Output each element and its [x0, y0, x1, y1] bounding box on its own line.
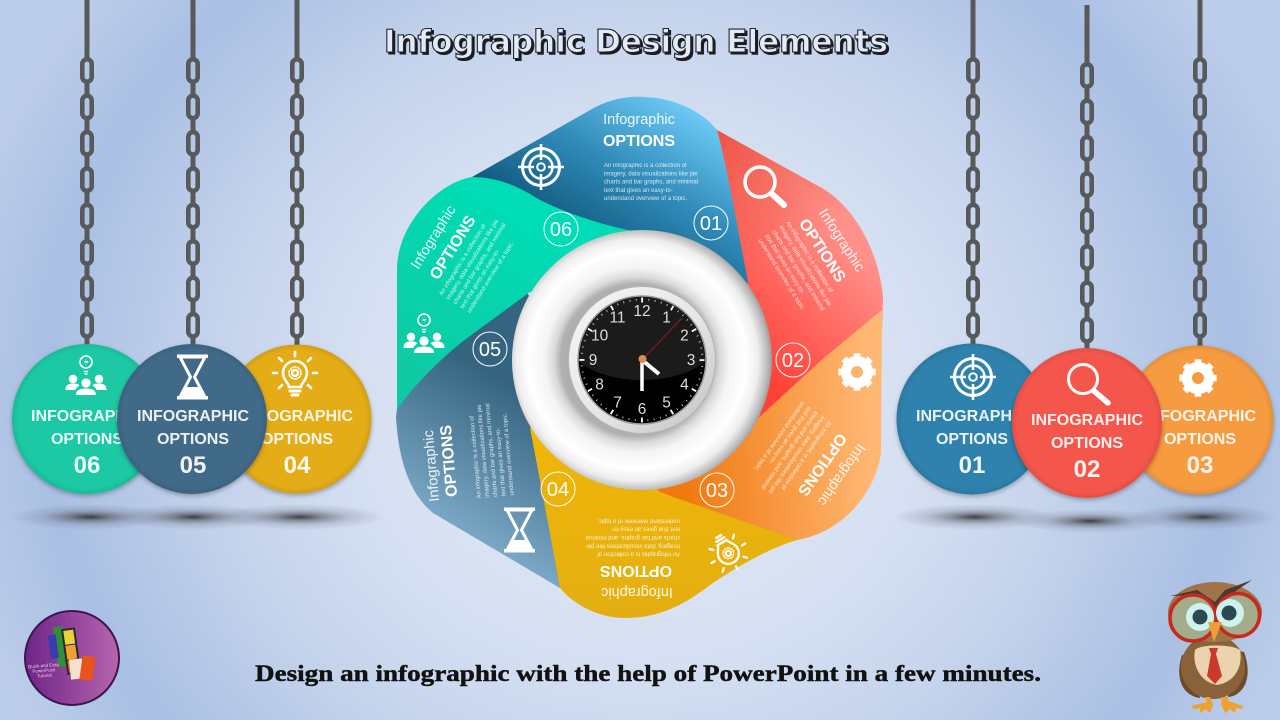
hanging circle 03: INFOGRAPHIC — [1144, 408, 1256, 425]
panel: 05 slate: An infographic is a collection of — [470, 415, 483, 499]
logo badge: Tutorial — [37, 672, 52, 679]
clock: 2 — [680, 328, 689, 344]
panel: 04 yellow: imagery, data visualizations like pie — [586, 542, 680, 548]
hanging circle 04: OPTIONS — [261, 431, 333, 448]
hanging circle 02: INFOGRAPHIC — [1031, 412, 1143, 429]
panel: 01 blue: 01 — [700, 213, 722, 235]
panel: 01 blue: Infographic — [603, 112, 675, 128]
panel: 03 orange: OPTIONS — [794, 430, 849, 499]
chains: left group — [82, 0, 302, 346]
panel: 02 red — [700, 130, 883, 430]
hanging circle 02: 02 — [1074, 456, 1100, 483]
panel: 01 blue — [472, 97, 748, 360]
hanging circle 06 — [12, 344, 162, 494]
hanging circle 06: 06 — [74, 452, 100, 479]
clock: 11 — [609, 310, 626, 327]
panel: 02 red: Infographic — [815, 206, 867, 275]
icon: people with bulb — [66, 356, 106, 395]
panel: 06 teal: understand overview of a topic. — [467, 240, 516, 314]
hanging circle 02 — [1012, 348, 1162, 498]
panel: 02 red: OPTIONS — [795, 216, 849, 286]
hanging circle 05 — [117, 344, 267, 494]
icon: gear — [1182, 362, 1214, 394]
owl mascot — [1168, 580, 1262, 713]
panel: 02 red: charts and bar graphs, and minimal — [770, 229, 825, 312]
hanging circle 06: OPTIONS — [51, 431, 123, 448]
panel: 05 slate: understand overview of a topic. — [502, 412, 516, 496]
clock: 4 — [680, 376, 689, 394]
white ring — [512, 230, 772, 490]
icon: hourglass — [177, 354, 208, 400]
panel: 05 slate: 05 — [479, 339, 501, 361]
clock — [568, 286, 716, 434]
panel: 02 red: An infographic is a collection of — [784, 221, 833, 294]
panel: 05 slate: charts and bar graphs, and minimal — [485, 403, 499, 497]
panel: 05 slate: text that gives an easy-to- — [496, 427, 508, 496]
panel: 04 yellow: understand overview of a topic. — [597, 518, 680, 524]
panel: 06 teal: imagery, data visualizations like pie — [446, 218, 501, 301]
hanging circle 04: 04 — [284, 452, 311, 479]
caption: Design an infographic with the help of PowerPoint in a few minutes. — [255, 661, 1041, 687]
hanging circle 04: INFOGRAPHIC — [241, 408, 353, 425]
panel: 06 teal: OPTIONS — [427, 212, 480, 283]
title: Infographic Design Elements — [384, 24, 888, 60]
panel: 05 slate: Infographic — [421, 429, 443, 502]
hanging circle 05: OPTIONS — [157, 431, 229, 448]
clock: 9 — [589, 352, 597, 369]
icon: lightbulb — [273, 352, 317, 395]
panel: 03 orange: text that gives an easy-to- — [767, 405, 812, 465]
clock: 5 — [662, 394, 671, 411]
clock: 7 — [613, 394, 622, 411]
hanging circle 01 — [896, 344, 1048, 494]
hanging circle 03: 03 — [1187, 452, 1213, 479]
panel: 03 orange: understand overview of a topic. — [752, 400, 805, 472]
panel: 02 red: text that gives an easy-to- — [763, 234, 805, 295]
panel: 04 yellow: Infographic — [601, 584, 673, 600]
logo badge — [25, 611, 119, 705]
clock: 1 — [662, 310, 671, 327]
panel: 03 orange: 03 — [706, 480, 728, 502]
panel: 04 yellow: OPTIONS — [600, 562, 672, 579]
panel: 02 red: 02 — [782, 350, 804, 372]
chains: right group — [968, 0, 1205, 351]
panel: 04 yellow: text that gives an easy-to- — [611, 526, 680, 532]
panel: 05 slate: OPTIONS — [438, 424, 461, 497]
central hexagon wheel — [396, 97, 883, 618]
panel: 06 teal: charts and bar graphs, and minimal — [453, 223, 508, 306]
panel: 04 yellow: An infographic is a collection of — [597, 550, 680, 556]
panel: 01 blue: An infographic is a collection of — [604, 163, 687, 169]
panel: 03 orange: imagery, data visualizations like pie — [766, 414, 825, 495]
clock: 6 — [638, 401, 646, 418]
hanging circle 01: OPTIONS — [936, 431, 1008, 448]
clock: 12 — [633, 303, 651, 320]
panel: 06 teal — [397, 177, 632, 410]
hanging circle 03 — [1124, 346, 1274, 494]
panel: 04 yellow: 04 — [547, 479, 569, 501]
hanging circle 01: INFOGRAPHIC — [916, 408, 1028, 425]
hanging circle 01: 01 — [959, 452, 985, 479]
panel: 04 yellow — [530, 420, 797, 618]
panel: 01 blue: OPTIONS — [603, 133, 675, 150]
logo badge: Quick and Easy — [28, 662, 60, 669]
hanging circle 06: INFOGRAPHIC — [31, 408, 143, 425]
panel: 02 red: imagery, data visualizations like pie — [777, 225, 832, 308]
panel: 06 teal: Infographic — [408, 203, 460, 272]
floor shadows: left group — [10, 504, 385, 530]
panel: 01 blue: imagery, data visualizations like pie — [604, 171, 698, 177]
panel: 04 yellow: charts and bar graphs, and minimal — [586, 534, 680, 540]
clock: 8 — [595, 376, 604, 394]
hanging circle 02: OPTIONS — [1051, 435, 1123, 452]
icon: magnifier — [1068, 364, 1108, 403]
panel: 01 blue: charts and bar graphs, and minimal — [604, 180, 698, 186]
hanging circle 04 — [222, 344, 372, 494]
panel: 05 slate — [396, 280, 600, 588]
floor shadows: right group — [893, 504, 1278, 533]
clock: 10 — [591, 328, 609, 344]
hanging circle 05: INFOGRAPHIC — [137, 408, 249, 425]
panel: 02 red: understand overview of a topic. — [756, 238, 806, 312]
panel: 06 teal: 06 — [550, 219, 572, 241]
panel: 01 blue: understand overview of a topic. — [604, 196, 687, 202]
panel: 03 orange: Infographic — [814, 440, 868, 508]
panel: 01 blue: text that gives an easy-to- — [604, 188, 673, 194]
clock: 3 — [687, 352, 695, 369]
panel: 06 teal: text that gives an easy-to- — [460, 249, 501, 310]
panel: 03 orange: charts and bar graphs, and minimal — [760, 410, 818, 490]
icon: target — [950, 354, 996, 400]
logo badge: PowerPoint — [32, 667, 56, 674]
panel: 06 teal: An infographic is a collection of — [439, 223, 488, 297]
panel: 05 slate: imagery, data visualizations like pie — [477, 403, 491, 498]
hanging circle 03: OPTIONS — [1164, 431, 1236, 448]
panel: 03 orange — [640, 310, 882, 540]
panel: 03 orange: An infographic is a collection of — [779, 419, 832, 491]
hanging circle 05: 05 — [180, 452, 206, 479]
